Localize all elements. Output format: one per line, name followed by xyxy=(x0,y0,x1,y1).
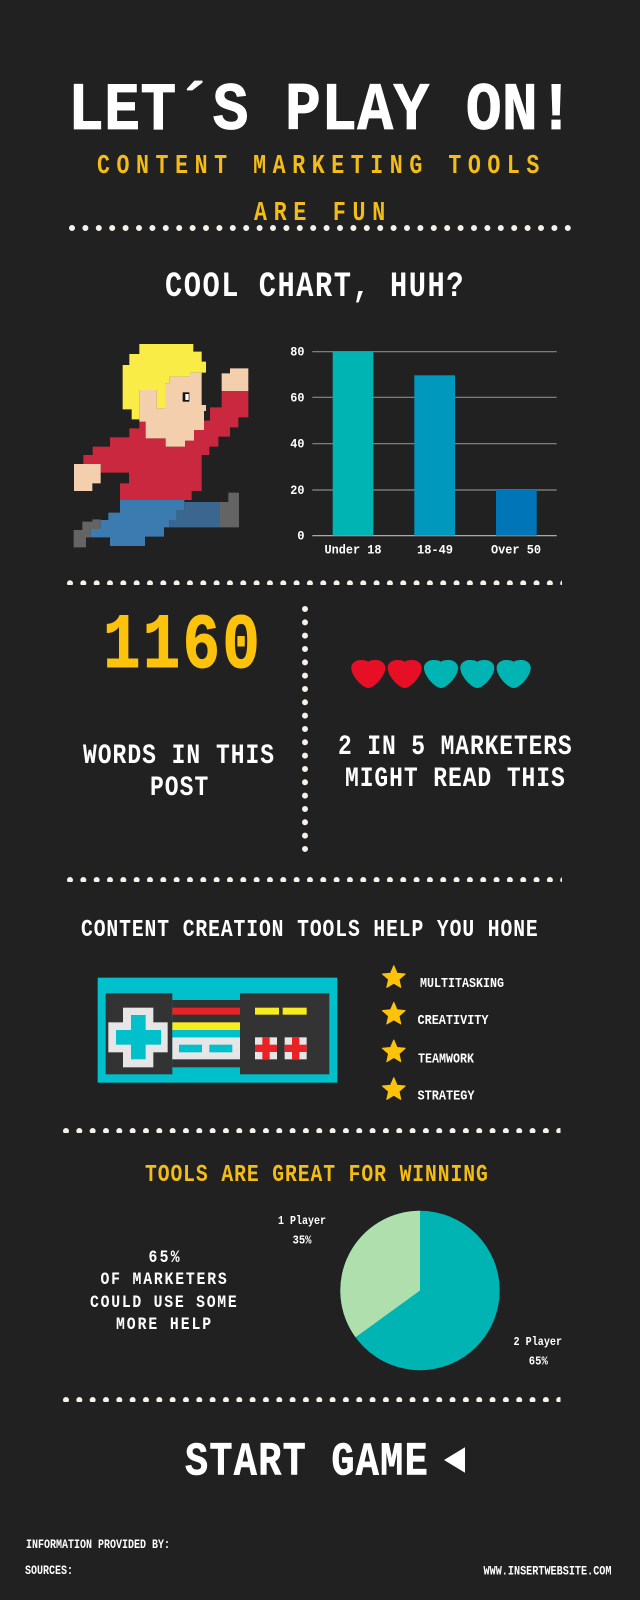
text: 65% of marketers xyxy=(90,1246,237,1335)
pie chart xyxy=(278,1211,562,1370)
text: 65% of marketers: COULD USE SOME xyxy=(90,1291,237,1312)
list: skills with stars: STRATEGY xyxy=(418,1090,475,1105)
list: skills with stars xyxy=(382,966,504,1105)
icon: pixel runner character xyxy=(74,344,248,547)
list: skills with stars: MULTITASKING xyxy=(420,977,504,992)
stat: 1160 words: POST xyxy=(150,772,208,804)
text: 65% of marketers: OF MARKETERS xyxy=(100,1269,227,1290)
bar chart: 80 xyxy=(290,345,305,360)
subtitle: ARE FUN xyxy=(254,199,385,229)
text: 65% of marketers: 65% xyxy=(148,1246,180,1267)
bar chart: Over 50 xyxy=(491,542,541,558)
footer: credits: INFORMATION PROVIDED BY: xyxy=(26,1538,170,1552)
footer: credits: WWW.INSERTWEBSITE.COM xyxy=(484,1565,612,1579)
footer: credits xyxy=(25,1538,612,1579)
bar chart: Under 18 xyxy=(324,542,382,558)
subtitle: CONTENT MARKETING TOOLS xyxy=(97,152,539,182)
stat: 1160 words xyxy=(83,603,274,804)
stat: hearts 2 in 5: MIGHT READ THIS xyxy=(345,763,565,795)
subtitle xyxy=(97,152,539,229)
bar chart: 60 xyxy=(290,390,305,405)
pie chart: 1 Player xyxy=(278,1214,326,1228)
heading: content creation tools: CONTENT CREATION TOOLS HELP YOU HONE xyxy=(81,916,538,944)
heading: cool chart: COOL CHART, HUH? xyxy=(165,266,463,307)
title: LET´S PLAY ON! xyxy=(68,74,574,150)
heading: tools are great: TOOLS ARE GREAT FOR WINNING xyxy=(145,1161,488,1189)
stat: hearts 2 in 5 xyxy=(338,660,572,795)
pie chart: 35% xyxy=(292,1234,312,1248)
footer: credits: SOURCES: xyxy=(25,1564,73,1578)
call to action: start game: START GAME xyxy=(185,1435,428,1489)
icon: game controller xyxy=(98,978,337,1083)
bar chart: 20 xyxy=(290,483,305,498)
bar chart: 18-49 xyxy=(417,542,453,558)
bar chart xyxy=(290,345,557,558)
bar chart: 40 xyxy=(290,437,305,452)
list: skills with stars: TEAMWORK xyxy=(418,1052,475,1067)
pie chart: 65% xyxy=(529,1354,548,1368)
stat: 1160 words: 1160 xyxy=(103,603,260,691)
list: skills with stars: CREATIVITY xyxy=(418,1014,489,1029)
text: 65% of marketers: MORE HELP xyxy=(116,1314,211,1335)
stat: hearts 2 in 5: 2 IN 5 MARKETERS xyxy=(338,731,572,763)
pie chart: 2 Player xyxy=(514,1335,562,1349)
stat: 1160 words: WORDS IN THIS xyxy=(83,740,274,772)
bar chart: 0 xyxy=(297,529,305,544)
